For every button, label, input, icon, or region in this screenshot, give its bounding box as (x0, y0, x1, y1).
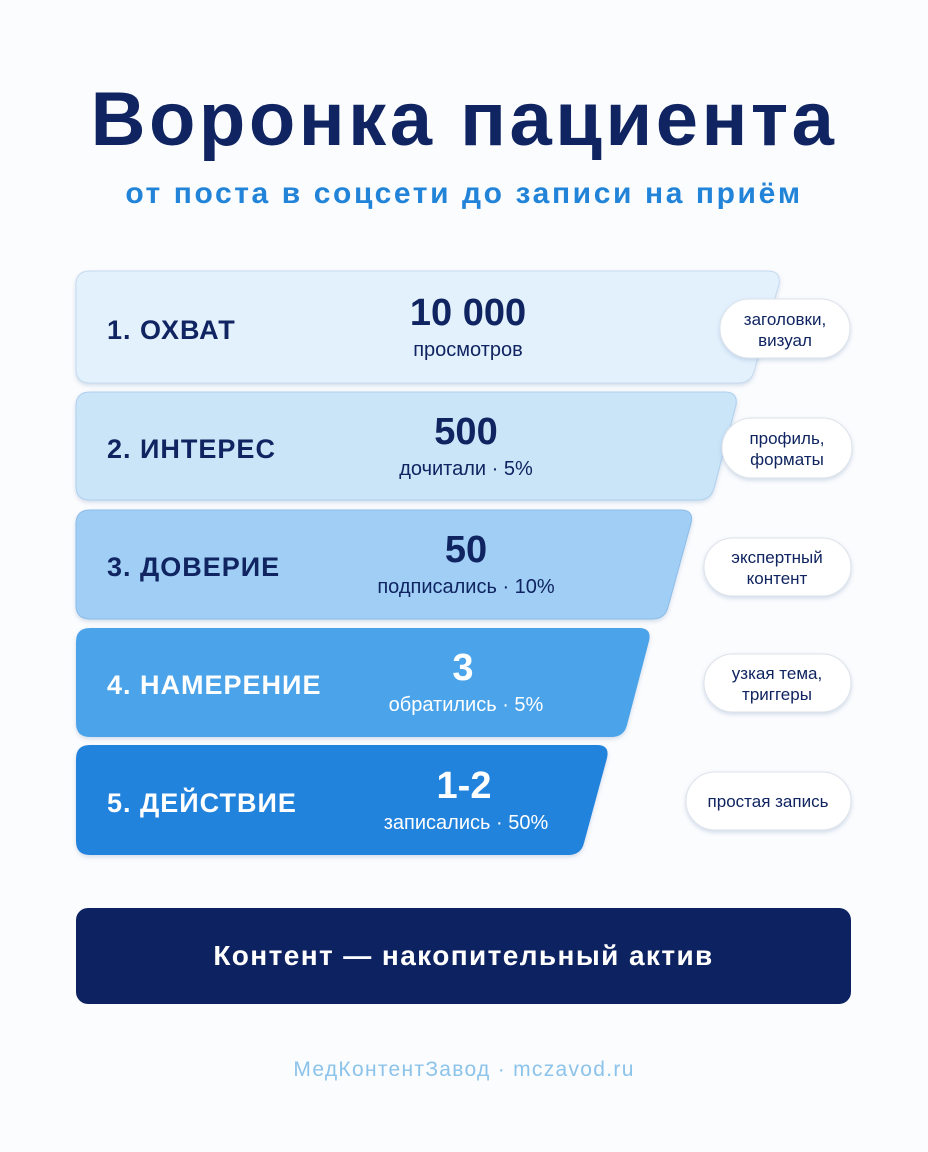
title: Воронка пациента (91, 77, 837, 162)
stage 1: 10 000 (410, 292, 526, 334)
bottom banner (76, 908, 851, 1004)
pill 5 (686, 772, 851, 830)
stage 4: 4. НАМЕРЕНИЕ (107, 670, 321, 700)
pill 2: профиль, (749, 429, 825, 448)
stage 1 (76, 271, 779, 383)
stage 3 (76, 510, 692, 619)
stage 3: 50 (445, 529, 487, 571)
stage 4: 3 (452, 647, 474, 689)
pill 3: экспертный (731, 548, 823, 567)
stage 3: подписались · 10% (377, 576, 555, 598)
stage 5: 5. ДЕЙСТВИЕ (107, 787, 297, 818)
pill 2: форматы (750, 450, 824, 469)
pill 1 (720, 299, 850, 358)
pill 4: триггеры (742, 685, 812, 704)
footer: МедКонтентЗавод · mczavod.ru (293, 1058, 635, 1081)
bottom banner: Контент — накопительный актив (213, 940, 714, 971)
pill 4 (704, 654, 851, 712)
stage 2: дочитали · 5% (399, 458, 533, 480)
pill 4: узкая тема, (732, 664, 822, 683)
pill 1: заголовки, (744, 310, 826, 329)
stage 4 (76, 628, 650, 737)
stage 1: 1. ОХВАТ (107, 315, 236, 345)
pill 1: визуал (758, 331, 812, 350)
stage 2 (76, 392, 736, 500)
stage 5: 1-2 (437, 765, 491, 807)
stage 4: обратились · 5% (389, 694, 544, 716)
pill 5: простая запись (708, 792, 829, 811)
stage 5: записались · 50% (384, 812, 548, 834)
stage 5 (76, 745, 608, 855)
subtitle: от поста в соцсети до записи на приём (125, 177, 803, 210)
stage 1: просмотров (413, 339, 523, 361)
stage 3: 3. ДОВЕРИЕ (107, 552, 280, 582)
pill 2 (722, 418, 852, 478)
stage 2: 500 (434, 411, 498, 453)
stage 2: 2. ИНТЕРЕС (107, 434, 276, 464)
pill 3: контент (747, 569, 808, 588)
pill 3 (704, 538, 851, 596)
